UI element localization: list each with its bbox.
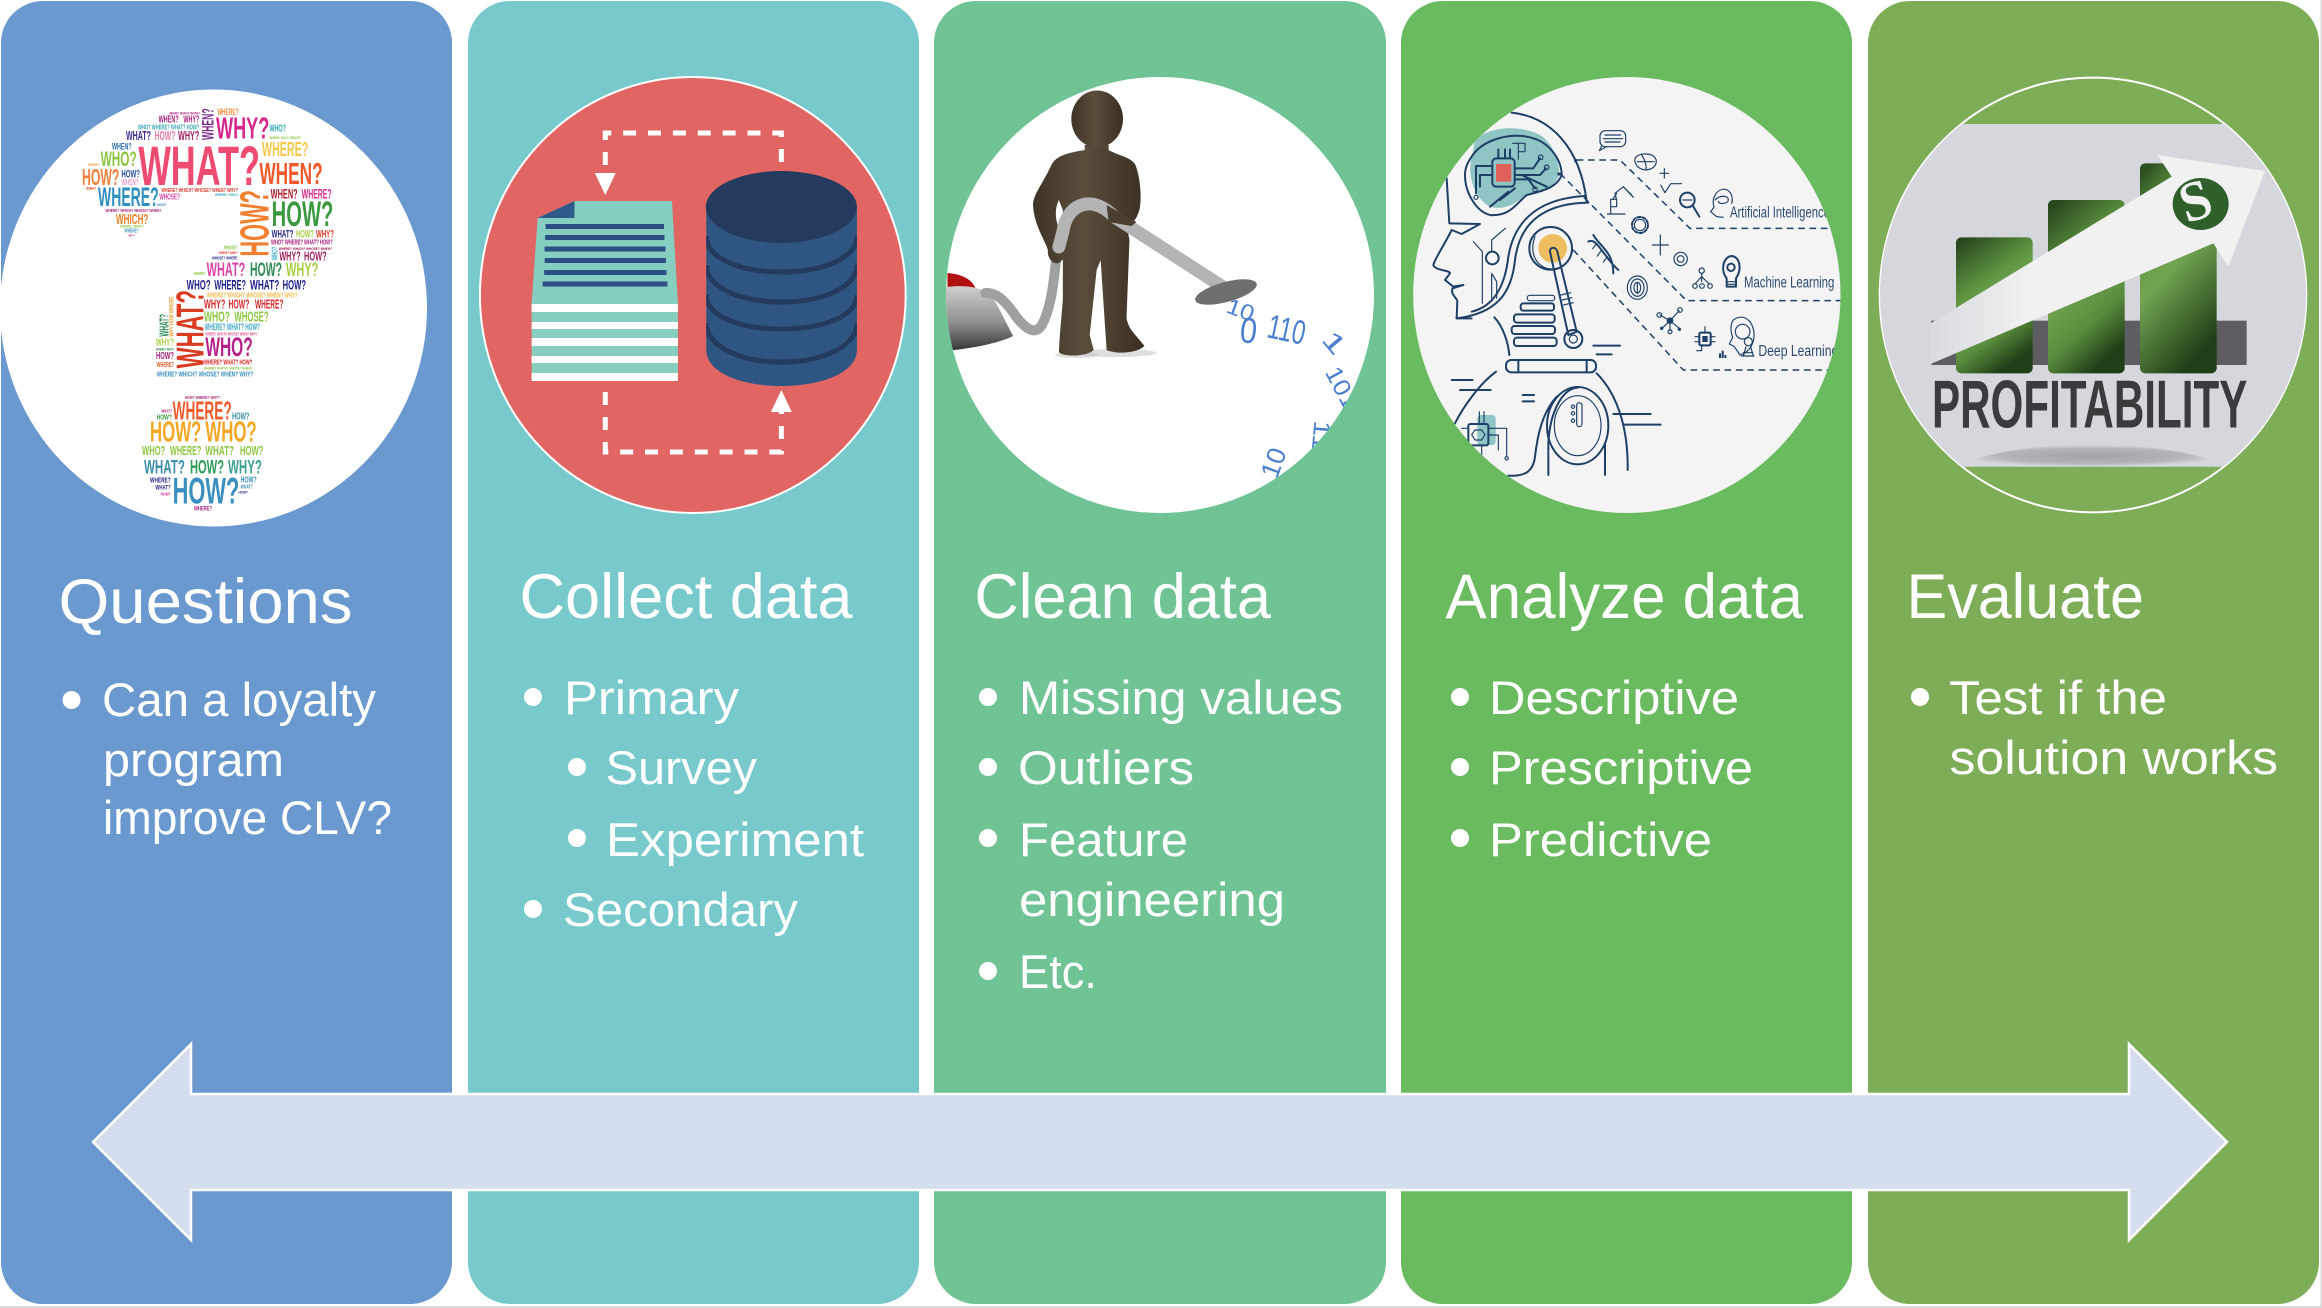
icon: question mark word cloud: HOW?: [161, 491, 171, 496]
icon: question mark word cloud: WHOSE?: [234, 308, 269, 325]
icon: question mark word cloud: WHO? WHERE? WHAT? HOW?: [138, 122, 200, 131]
icon: AI robot head line art: Machine Learning: [1744, 275, 1834, 292]
heading: clean data: Clean data: [974, 562, 1272, 632]
icon: question mark word cloud: WHO?: [270, 247, 279, 260]
icon: question mark word cloud: WHERE?: [262, 139, 308, 161]
icon: question mark word cloud: [0, 90, 427, 526]
icon: question mark word cloud: WHERE? WHAT? WHOSE?: [269, 136, 302, 140]
icon: profitability chart: S: [2172, 167, 2220, 236]
icon: question mark word cloud: HOW?: [238, 490, 249, 494]
icon: figure vacuuming binary digits: 110: [1264, 308, 1309, 353]
bullet: loyalty question: Can a loyalty: [102, 673, 376, 726]
icon: question mark word cloud: WHOSE? WHERE: [212, 255, 237, 260]
heading: evaluate: Evaluate: [1906, 562, 2144, 632]
icon: question mark word cloud: WHERE?: [217, 107, 239, 117]
bullet: test the solution: Test if the: [1949, 671, 2167, 724]
heading: analyze data: Analyze data: [1446, 562, 1804, 632]
icon: AI robot head line art: [1413, 77, 1843, 513]
panel background: [1, 1, 452, 1304]
icon: question mark word cloud: HOW? WHERE? WHY?: [185, 395, 220, 400]
bullet: survey: Survey: [606, 741, 758, 794]
panel: questions: [0, 1, 452, 1304]
icon: question mark word cloud: WHERE? WHICH? WHOSE? WHEN? WHY?: [161, 188, 238, 194]
icon: question mark word cloud: WHAT?: [126, 128, 151, 143]
bullet: descriptive: Descriptive: [1489, 671, 1739, 724]
icon: question mark word cloud: WHERE? WHICH? WHOSE? WHEN? WHY?: [207, 290, 298, 299]
icon: question mark word cloud: WHEN?: [86, 186, 96, 191]
icon: question mark word cloud: WHERE?: [98, 182, 159, 212]
bullet: feature engineering: Feature: [1019, 813, 1188, 866]
icon: question mark word cloud: WHEN?: [121, 177, 139, 187]
icon: question mark word cloud: WHERE?: [170, 443, 201, 458]
heading: questions: Questions: [58, 567, 352, 637]
icon: question mark word cloud: WHERE?: [157, 360, 174, 369]
icon: question mark word cloud: WHEN?: [259, 157, 323, 191]
bullet: outliers: Outliers: [1018, 741, 1194, 794]
icon: question mark word cloud: WHY?: [156, 338, 174, 349]
icon: question mark word cloud: HOW?: [121, 168, 140, 180]
bullet: etc: [979, 945, 1097, 998]
icon: figure vacuuming binary digits: 10: [1256, 444, 1293, 482]
panel: analyze data: [1401, 1, 1852, 1304]
icon: question mark word cloud: WHEN?: [159, 115, 179, 126]
icon: question mark word cloud: WHAT?: [155, 484, 171, 491]
icon: question mark word cloud: WHAT?: [205, 443, 234, 458]
icon: question mark word cloud: HOW?: [304, 249, 327, 264]
icon: question mark word cloud: WHERE?: [194, 271, 205, 276]
icon: question mark word cloud: WHAT?: [250, 276, 279, 292]
icon: question mark word cloud: WHERE? WHICH? WHOSE? WHEN? WHY?: [205, 331, 258, 336]
icon: question mark word cloud: HOW?: [155, 128, 175, 143]
icon: question mark word cloud: WHERE? WHO?: [215, 193, 239, 197]
bullet: predictive: Predictive: [1489, 813, 1712, 866]
icon: question mark word cloud: WHERE? WHICH? WHOSE? WHEN?: [204, 366, 253, 370]
icon: profitability chart: [1870, 78, 2317, 512]
icon: question mark word cloud: WHY?: [128, 234, 135, 238]
icon: question mark word cloud: HOW?: [241, 475, 257, 485]
icon: AI robot head line art: Deep Learning: [1758, 343, 1838, 360]
icon: question mark word cloud: HOW?: [157, 412, 172, 421]
icon: question mark word cloud: WHERE? WHAT?: [219, 251, 238, 255]
icon: question mark word cloud: HOW?: [296, 228, 314, 240]
bullet: primary: Primary: [564, 671, 740, 724]
icon: AI robot head line art: Artificial Intelligence: [1730, 204, 1830, 221]
icon: question mark word cloud: HOW?: [272, 195, 333, 234]
icon: question mark word cloud: WHAT?: [161, 409, 172, 414]
bullet: test the solution: solution works: [1950, 731, 2278, 784]
icon: document and database exchange: [480, 77, 906, 513]
icon: figure vacuuming binary digits: 1: [1316, 326, 1351, 361]
icon: question mark word cloud: WHO?: [187, 276, 211, 292]
icon: question mark word cloud: WHOSE?: [224, 245, 238, 251]
icon: question mark word cloud: WHERE?: [88, 163, 100, 167]
icon: question mark word cloud: WHERE? WHICH? WHOSE? WHEN? WHY?: [157, 370, 254, 379]
bullet: prescriptive: Prescriptive: [1489, 741, 1753, 794]
icon: question mark word cloud: WHAT?: [241, 485, 253, 491]
icon: figure vacuuming binary digits: [945, 77, 1374, 513]
icon: question mark word cloud: WHO?: [142, 443, 165, 458]
icon: question mark word cloud: WHY?: [178, 128, 199, 143]
icon: figure vacuuming binary digits: 11: [1306, 419, 1335, 452]
icon: question mark word cloud: HOW?: [173, 469, 239, 511]
icon: question mark word cloud: WHAT?: [138, 134, 260, 197]
icon: question mark word cloud: HOW?: [250, 259, 282, 281]
bullet: etc: Etc.: [1019, 945, 1097, 998]
icon: question mark word cloud: HOW?: [156, 351, 174, 362]
icon: question mark word cloud: HOW?: [283, 276, 306, 292]
icon: question mark word cloud: WHY HOW WHERE: [169, 297, 175, 337]
bullet: feature engineering: engineering: [1019, 873, 1285, 926]
bullet: loyalty question: improve CLV?: [103, 791, 392, 844]
icon: question mark word cloud: HOW?: [240, 443, 263, 458]
icon: question mark word cloud: HOW?: [150, 417, 201, 449]
icon: question mark word cloud: WHERE?: [150, 476, 171, 485]
icon: question mark word cloud: WHO?: [101, 147, 137, 171]
bullet: experiment: Experiment: [606, 813, 864, 866]
icon: question mark word cloud: WHO?: [205, 417, 257, 449]
icon: question mark word cloud: WHERE?: [194, 506, 212, 513]
icon: question mark word cloud: WHO? WHERE? WHAT? HOW?: [271, 238, 333, 247]
panel background: [934, 1, 1386, 1304]
panel: clean data: [934, 1, 1386, 1304]
panel background: [1401, 1, 1852, 1304]
icon: question mark word cloud: HOW?: [232, 411, 249, 422]
icon: question mark word cloud: WHERE?: [302, 185, 332, 201]
icon: question mark word cloud: WHY?: [183, 115, 199, 126]
icon: question mark word cloud: HOW?: [82, 164, 119, 190]
icon: question mark word cloud: WHERE? WHICH? WHOSE?: [169, 110, 200, 115]
icon: question mark word cloud: WHERE?: [255, 297, 283, 312]
icon: question mark word cloud: WHERE? WHICH? WHOSE? WHEN?: [105, 208, 161, 213]
bullet: loyalty question: program: [103, 733, 284, 786]
icon: question mark word cloud: WHERE? WHAT? HOW?: [205, 322, 260, 332]
icon: question mark word cloud: WHY?: [228, 456, 262, 478]
icon: question mark word cloud: WHERE?: [125, 229, 139, 235]
icon: question mark word cloud: WHO?: [204, 308, 230, 325]
icon: question mark word cloud: WHAT?: [207, 259, 245, 281]
icon: question mark word cloud: WHY?: [316, 228, 334, 240]
panel: collect data: [468, 1, 919, 1304]
icon: question mark word cloud: WHAT?: [157, 314, 172, 337]
icon: question mark word cloud: HOW?: [229, 297, 249, 312]
icon: question mark word cloud: WHEN?: [199, 108, 217, 140]
icon: question mark word cloud: HOW?: [190, 456, 224, 478]
icon: question mark word cloud: WHEN?: [112, 141, 132, 151]
icon: question mark word cloud: WHICH?: [116, 211, 148, 228]
icon: question mark word cloud: WHY?: [204, 297, 225, 312]
icon: question mark word cloud: WHAT?: [272, 228, 293, 240]
icon: question mark word cloud: WHY?: [279, 249, 301, 264]
icon: question mark word cloud: WHAT?: [144, 456, 185, 478]
icon: figure vacuuming binary digits: 10: [1223, 293, 1258, 326]
icon: figure vacuuming binary digits: 101: [1319, 362, 1363, 414]
panel background: [1868, 1, 2319, 1304]
arrow: double-headed process arrow: [93, 1044, 2227, 1240]
icon: question mark word cloud: WHOSE?: [159, 191, 180, 201]
panel background: [468, 1, 919, 1304]
icon: question mark word cloud: WHERE?: [173, 397, 232, 425]
icon: question mark word cloud: WHERE? WHO?: [156, 348, 174, 352]
heading: collect data: Collect data: [520, 562, 853, 632]
bullet: test the solution: [1911, 671, 2278, 784]
icon: question mark word cloud: WHY?: [216, 112, 269, 145]
bullet: loyalty question: [62, 673, 392, 844]
icon: question mark word cloud: WHERE? WHAT? HOW?: [204, 357, 253, 366]
icon: question mark word cloud: WHOSE?: [157, 203, 167, 207]
icon: question mark word cloud: WHO?: [205, 332, 253, 362]
icon: question mark word cloud: WHY?: [286, 259, 318, 281]
bullet: feature engineering: [979, 813, 1285, 926]
icon: question mark word cloud: WHERE? WHAT?: [120, 225, 145, 229]
icon: question mark word cloud: WHERE? WHICH? WHOSE? WHEN?: [279, 246, 332, 251]
icon: question mark word cloud: WHERE?: [214, 276, 246, 292]
icon: question mark word cloud: HOW?: [231, 190, 277, 257]
icon: question mark word cloud: WHEN?: [271, 185, 298, 201]
icon: figure vacuuming binary digits: 0: [1238, 310, 1259, 352]
icon: question mark word cloud: WHAT?: [169, 290, 212, 368]
icon: question mark word cloud: WHO?: [269, 124, 286, 135]
panel: evaluate: [1868, 1, 2319, 1304]
bullet: secondary: Secondary: [563, 883, 799, 936]
bullet: missing values: Missing values: [1019, 671, 1343, 724]
